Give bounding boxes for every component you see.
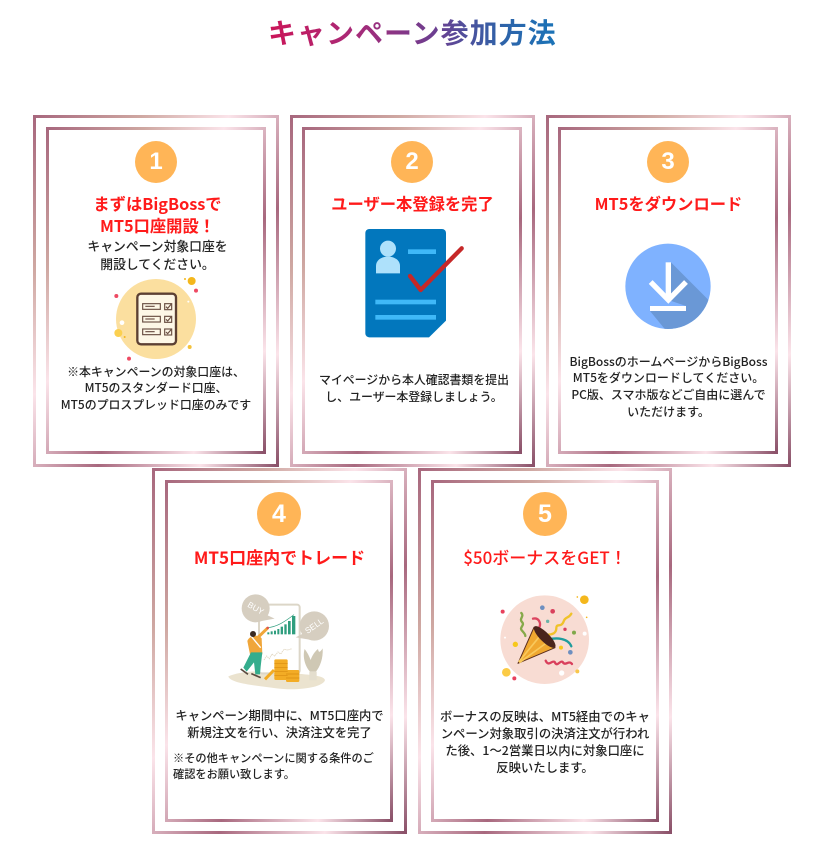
heading: step 4: MT5口座内でトレード: [194, 544, 365, 569]
note: step 1: ※本キャンペーンの対象口座は、: [67, 362, 245, 380]
panel: step 2: [290, 115, 535, 467]
step number 4: [257, 492, 301, 536]
inner frame: [46, 127, 266, 454]
icon: download: [625, 244, 711, 329]
body text: step 1: キャンペーン対象口座を: [87, 236, 228, 255]
outer frame: [418, 468, 672, 834]
icon: checklist: [114, 277, 198, 361]
step number 2: [391, 141, 433, 183]
note: step 1: MT5のスタンダード口座、: [85, 379, 227, 396]
step number 3: [647, 141, 689, 183]
step number 5: 5: [538, 500, 552, 528]
body text: step 2: マイページから本人確認書類を提出: [319, 370, 509, 388]
heading: step 2: ユーザー本登録を完了: [331, 191, 494, 215]
body text: step 1: [87, 236, 228, 273]
body text: step 5: [440, 706, 650, 776]
title: キャンペーン参加方法: [268, 12, 557, 52]
step number 1: 1: [149, 148, 163, 175]
inner frame: [165, 480, 393, 822]
step number 4: 4: [272, 500, 286, 528]
illustration: party popper: [500, 595, 589, 684]
note: step 4: 確認をお願い致します。: [173, 766, 295, 782]
note: step 1: [61, 362, 251, 412]
heading: step 3: MT5をダウンロード: [595, 191, 742, 215]
icon: document with check mark: [365, 229, 464, 338]
illustration: trader with chart: BUY: [246, 599, 266, 617]
body text: step 2: し、ユーザー本登録しましょう。: [325, 388, 503, 404]
panel: step 3: [546, 115, 791, 467]
body text: step 1: 開設してください。: [100, 254, 215, 273]
illustration: trader with chart: SELL: [303, 616, 326, 636]
inner frame: [302, 127, 522, 454]
outer frame: [152, 468, 407, 834]
body text: step 5: ボーナスの反映は、MT5経由でのキャ: [440, 706, 650, 724]
panel: step 1: [33, 115, 279, 467]
outer frame: [33, 115, 279, 467]
step number 3: 3: [661, 148, 675, 175]
panel: step 4: [152, 468, 407, 834]
inner frame: [431, 480, 659, 822]
heading: step 1: MT5口座開設！: [100, 213, 215, 237]
panel: step 5: [418, 468, 672, 834]
note: step 4: [173, 750, 374, 782]
heading: step 1: [93, 191, 222, 237]
body text: step 3: MT5をダウンロードしてください。: [573, 369, 764, 386]
body text: step 4: 新規注文を行い、決済注文を完了: [187, 722, 372, 740]
body text: step 3: [570, 353, 768, 420]
inner frame: [558, 127, 778, 454]
illustration: trader with chart: [228, 594, 329, 690]
body text: step 5: た後、1〜2営業日以内に対象口座に: [445, 740, 645, 758]
outer frame: [290, 115, 535, 467]
body text: step 5: 反映いたします。: [496, 758, 594, 776]
step number 5: [523, 492, 567, 536]
heading: step 5: $50ボーナスをGET！: [463, 544, 627, 569]
body text: step 5: ンペーン対象取引の決済注文が行われ: [441, 724, 649, 742]
body text: step 2: [319, 370, 509, 404]
outer frame: [546, 115, 791, 467]
step number 1: [135, 141, 177, 183]
step number 2: 2: [405, 148, 419, 175]
body text: step 3: BigBossのホームページからBigBoss: [570, 353, 767, 370]
body text: step 4: [175, 706, 384, 740]
body text: step 4: キャンペーン期間中に、MT5口座内で: [175, 706, 384, 724]
note: step 1: MT5のプロスプレッド口座のみです: [61, 396, 251, 412]
body text: step 3: いただけます。: [627, 403, 710, 420]
heading: step 1: まずはBigBossで: [93, 191, 222, 215]
body text: step 3: PC版、スマホ版などご自由に選んで: [571, 386, 766, 403]
note: step 4: ※その他キャンペーンに関する条件のご: [173, 750, 374, 766]
